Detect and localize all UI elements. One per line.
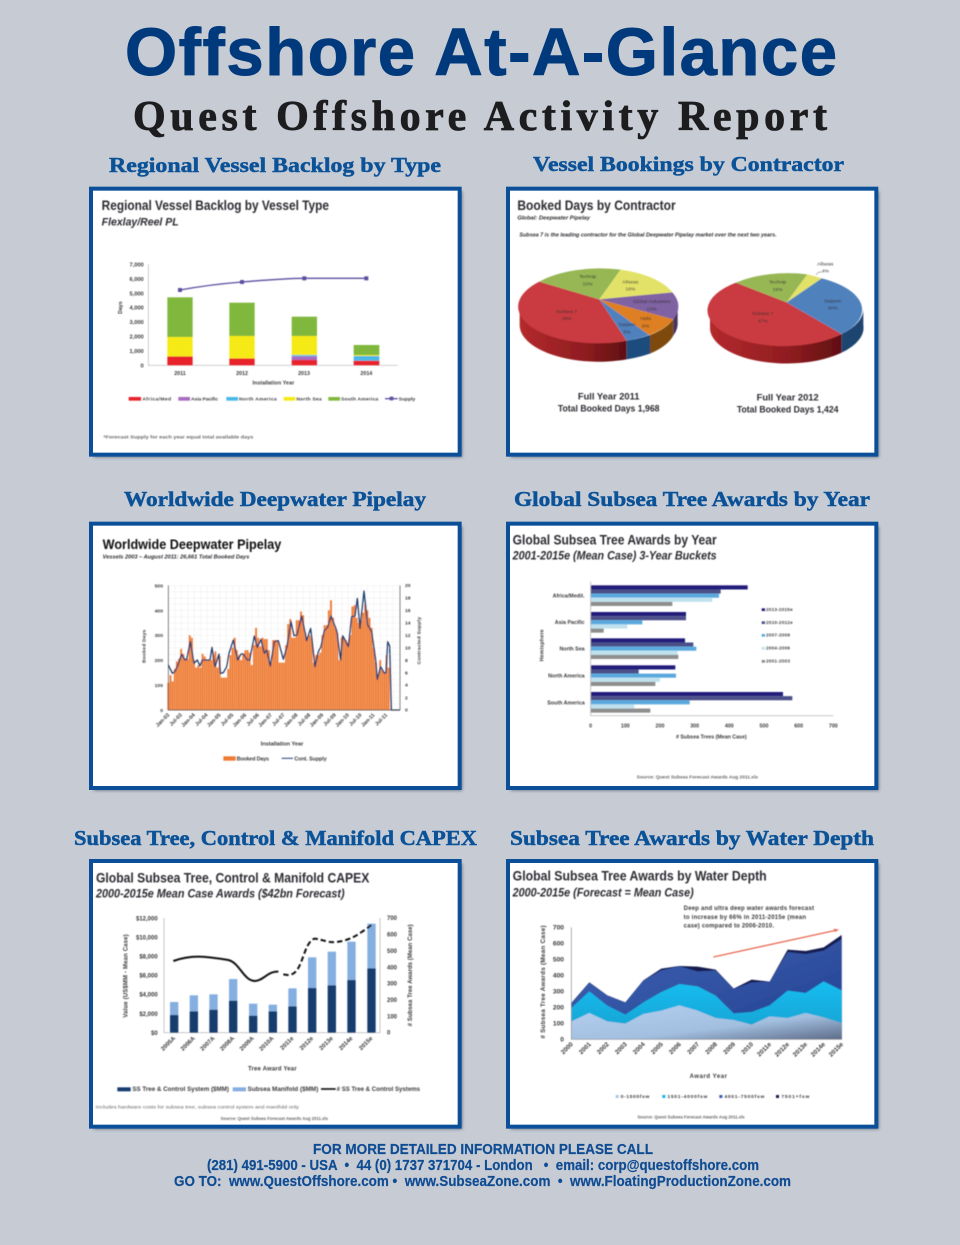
panel: regional vessel backlog chart: *Forecast Supply for each year equal total available days <box>103 435 254 441</box>
panel: water depth chart: 100 <box>553 1021 564 1028</box>
panel: worldwide deepwater pipelay chart: Jul-06 <box>246 712 261 728</box>
panel: capex chart: $10,000 <box>136 935 158 941</box>
panel: worldwide deepwater pipelay chart: Jan-10 <box>335 712 351 729</box>
panel: worldwide deepwater pipelay chart: Jan-04 <box>181 712 197 729</box>
panel: capex chart: Includes hardware costs for subsea tree, subsea control system and manifold only <box>96 1105 300 1111</box>
panel: capex chart: 400 <box>387 965 398 971</box>
panel: global subsea tree awards chart: 600 <box>794 724 803 730</box>
panel: regional vessel backlog chart: 2013 <box>298 371 310 377</box>
legend: North Sea <box>296 396 322 402</box>
legend: Asia Pacific <box>191 396 218 402</box>
heading: vessel bookings: Vessel Bookings by Contractor <box>533 152 844 176</box>
panel: booked days by contractor pies <box>508 189 879 457</box>
panel: regional vessel backlog chart: 2,000 <box>130 335 144 341</box>
panel: worldwide deepwater pipelay chart: 14 <box>405 620 411 626</box>
panel: global subsea tree awards chart: 400 <box>725 724 734 730</box>
panel: water depth chart: 200 <box>553 1005 564 1012</box>
title: Offshore At-A-Glance <box>125 15 837 90</box>
legend: 7501+fsw <box>781 1094 809 1100</box>
panel: water depth chart: 2015e <box>828 1041 845 1059</box>
pie: full year 2011: 6% <box>642 323 650 329</box>
panel: worldwide deepwater pipelay chart: Jul-04 <box>194 712 209 728</box>
area chart <box>571 935 842 1039</box>
panel: worldwide deepwater pipelay chart: Jan-06 <box>232 712 248 729</box>
panel: water depth chart: 2009 <box>722 1041 737 1056</box>
panel: global subsea tree awards chart: 2001-2015e (Mean Case) 3-Year Buckets <box>512 550 717 563</box>
panel: capex chart: $2,000 <box>139 1012 158 1018</box>
legend: 2013-2015e <box>766 607 793 612</box>
legend: Booked Days <box>237 756 269 762</box>
panel: worldwide deepwater pipelay chart: 20 <box>405 583 411 589</box>
panel: worldwide deepwater pipelay chart: Jul-08 <box>297 712 312 728</box>
panel: capex chart: $0 <box>151 1031 158 1037</box>
panel: water depth chart: 2002 <box>596 1041 611 1056</box>
callout text: case) compared to 2006-2010. <box>684 924 774 930</box>
panel: regional vessel backlog chart: Flexlay/Reel PL <box>102 216 179 228</box>
footer contact text: (281) 491-5900 - USA • 44 (0) 1737 371704 - London • email: corp@questoffshore.com <box>207 1158 759 1174</box>
supply line <box>178 276 368 292</box>
pie: full year 2012 <box>707 261 864 363</box>
panel: worldwide deepwater pipelay chart: 200 <box>155 658 163 664</box>
panel: global subsea tree awards chart: 200 <box>656 724 664 730</box>
pie: full year 2011: 22% <box>583 281 593 287</box>
panel: worldwide deepwater pipelay chart: 4 <box>405 683 408 689</box>
panel: capex chart: Tree Award Year <box>248 1067 297 1073</box>
pie: full year 2012: 19% <box>773 287 783 293</box>
legend <box>117 1087 421 1093</box>
panel: global subsea tree awards chart: Hemisphere <box>539 629 545 661</box>
panel: capex chart: # Subsea Tree Awards (Mean Case) <box>408 924 414 1026</box>
callout text: Deep and ultra deep water awards forecast <box>684 906 814 912</box>
panel: capex chart: 2015e <box>358 1035 375 1052</box>
footer contact text <box>174 1142 791 1190</box>
pie: full year 2011: Subsea 7 <box>556 309 577 315</box>
panel: capex chart <box>91 861 462 1129</box>
panel: water depth chart: 2010 <box>740 1041 755 1056</box>
panel: water depth chart: 2011e <box>756 1041 773 1058</box>
heading: regional vessel backlog: Regional Vessel Backlog by Type <box>109 153 441 177</box>
panel: worldwide deepwater pipelay chart: 6 <box>405 670 408 676</box>
pie: full year 2012: Saipem <box>824 299 841 305</box>
panel: regional vessel backlog chart: 2011 <box>174 371 186 377</box>
panel: worldwide deepwater pipelay chart: Jan-08 <box>283 712 299 729</box>
panel: capex chart: Source: Quest Subsea Forecast Awards Aug 2011.xls <box>221 1116 329 1121</box>
panel: worldwide deepwater pipelay chart: Jul-07 <box>271 712 286 728</box>
panel: worldwide deepwater pipelay chart: 0 <box>405 708 408 714</box>
panel: regional vessel backlog chart: 5,000 <box>130 291 144 297</box>
panel: water depth chart: 300 <box>553 989 564 996</box>
heading: water depth: Subsea Tree Awards by Water Depth <box>510 826 874 850</box>
legend: 1501-4000fsw <box>667 1094 707 1100</box>
panel: water depth chart: 2004 <box>632 1041 647 1056</box>
pie: full year 2012: 47% <box>758 318 768 324</box>
line: contracted supply <box>168 591 400 710</box>
panel: global subsea tree awards chart: 300 <box>690 724 699 730</box>
panel: worldwide deepwater pipelay chart: 18 <box>405 596 411 602</box>
panel: capex chart: $12,000 <box>136 916 158 922</box>
panel: capex chart: 100 <box>387 1014 398 1020</box>
panel: worldwide deepwater pipelay chart: Jan-11 <box>360 712 376 728</box>
panel: regional vessel backlog chart: Days <box>118 301 124 314</box>
panel: capex chart: 2009A <box>239 1035 256 1053</box>
panel: capex chart: 2007A <box>200 1035 217 1053</box>
panel: worldwide deepwater pipelay chart: Jul-11 <box>374 712 389 727</box>
panel: water depth chart: 2006 <box>668 1041 683 1056</box>
legend: 2007-2009 <box>766 633 790 638</box>
panel: regional vessel backlog chart: 7,000 <box>130 262 144 268</box>
panel: capex chart: 2010A <box>259 1035 276 1053</box>
legend: # SS Tree & Control Systems <box>337 1087 421 1093</box>
stacked bars <box>170 924 376 1033</box>
panel: capex chart: 2014e <box>338 1035 355 1052</box>
panel: capex chart: Value (US$MM - Mean Case) <box>123 934 129 1018</box>
panel: regional vessel backlog chart: 1,000 <box>130 349 144 355</box>
panel: booked days by contractor pies: Subsea 7 is the leading contractor for the Global Deepwater Pipelay market over the next two years. <box>519 232 777 238</box>
heading: global subsea tree awards: Global Subsea Tree Awards by Year <box>514 487 870 511</box>
legend: North America <box>239 396 277 402</box>
line: ss tree systems <box>173 924 372 981</box>
pie: full year 2011: Helix <box>640 316 652 322</box>
panel: booked days by contractor pies: Full Year 2011 <box>578 392 639 402</box>
panel: water depth chart: 700 <box>553 925 564 932</box>
panel: water depth chart: # Subsea Tree Awards (Mean Case) <box>540 925 547 1039</box>
panel: capex chart: $4,000 <box>139 993 158 999</box>
panel: water depth chart: 0 <box>560 1037 564 1044</box>
heading: capex: Subsea Tree, Control & Manifold CAPEX <box>74 826 477 850</box>
panel: global subsea tree awards chart: North Sea <box>559 646 585 652</box>
panel: worldwide deepwater pipelay chart: Jan-07 <box>258 712 274 729</box>
legend: 2010-2012e <box>766 620 793 625</box>
panel: water depth chart: 2012e <box>774 1041 791 1059</box>
footer contact text: GO TO: www.QuestOffshore.com • www.SubseaZone.com • www.FloatingProductionZone.com <box>174 1174 791 1190</box>
legend: 4001-7500fsw <box>724 1094 764 1100</box>
panel: worldwide deepwater pipelay chart: Contracted Supply <box>416 617 422 664</box>
panel: global subsea tree awards chart <box>508 524 879 791</box>
pie: full year 2011 <box>518 268 678 362</box>
panel: global subsea tree awards chart: North America <box>548 674 585 680</box>
pie: full year 2011: Technip <box>579 274 596 280</box>
panel: global subsea tree awards chart: Africa/Medit. <box>553 593 585 599</box>
panel: capex chart: 2008A <box>219 1035 237 1053</box>
legend: Cont. Supply <box>294 756 327 762</box>
panel: capex chart: 700 <box>387 916 398 922</box>
pie: full year 2011: Allseas <box>622 279 639 285</box>
legend <box>129 396 416 402</box>
panel: water depth chart: Source: Quest Subsea Forecast Awards Aug 2011.xls <box>637 1115 745 1120</box>
pie: full year 2011: Global Industries <box>633 299 671 305</box>
panel: water depth chart: Global Subsea Tree Awards by Water Depth <box>513 869 767 884</box>
panel: global subsea tree awards chart: Global Subsea Tree Awards by Year <box>513 532 717 547</box>
legend: Subsea Manifold ($MM) <box>248 1087 318 1093</box>
panel: worldwide deepwater pipelay chart: Jul-03 <box>169 712 184 728</box>
panel: water depth chart: 500 <box>553 957 564 964</box>
panel: worldwide deepwater pipelay chart <box>91 524 462 791</box>
panel: water depth chart: 2014e <box>810 1041 827 1059</box>
pie: full year 2011: 39% <box>562 316 572 322</box>
panel: booked days by contractor pies: Total Booked Days 1,424 <box>737 404 839 414</box>
legend <box>762 607 793 664</box>
panel: worldwide deepwater pipelay chart: 2 <box>405 695 408 701</box>
pie: full year 2011: 16% <box>625 287 636 293</box>
panel: worldwide deepwater pipelay chart: Jan-09 <box>309 712 325 729</box>
subtitle: Quest Offshore Activity Report <box>133 94 827 140</box>
panel: water depth chart: 400 <box>553 973 564 980</box>
panel: global subsea tree awards chart: 0 <box>589 724 592 730</box>
panel: booked days by contractor pies: Booked Days by Contractor <box>517 198 676 213</box>
panel: worldwide deepwater pipelay chart: Jul-09 <box>323 712 338 728</box>
panel: worldwide deepwater pipelay chart: Jan-05 <box>206 712 222 729</box>
panel: global subsea tree awards chart: 700 <box>829 724 838 730</box>
panel: regional vessel backlog chart: 2012 <box>236 371 248 377</box>
pie: full year 2012: Allseas <box>817 261 834 267</box>
legend <box>223 756 327 762</box>
panel: global subsea tree awards chart: Asia Pacific <box>555 620 585 626</box>
panel: worldwide deepwater pipelay chart: 500 <box>155 583 163 589</box>
bars: booked days <box>168 600 389 710</box>
panel: capex chart: 500 <box>387 949 398 955</box>
panel: global subsea tree awards chart: # Subsea Trees (Mean Case) <box>676 735 747 741</box>
panel: water depth chart: 600 <box>553 941 564 948</box>
legend: SS Tree & Control System ($MM) <box>132 1087 229 1093</box>
panel: water depth chart: 2000-2015e (Forecast = Mean Case) <box>512 886 694 899</box>
panel: worldwide deepwater pipelay chart: Jan-03 <box>155 712 171 729</box>
heading: worldwide deepwater pipelay: Worldwide Deepwater Pipelay <box>124 487 427 511</box>
panel: capex chart: 600 <box>387 933 398 939</box>
panel: water depth chart: 2007 <box>686 1041 701 1056</box>
panel: capex chart: 0 <box>387 1031 391 1037</box>
pie: full year 2011: 5% <box>623 329 631 335</box>
panel: worldwide deepwater pipelay chart: 0 <box>160 708 163 714</box>
panel: booked days by contractor pies: Global: Deepwater Pipelay <box>517 216 591 222</box>
legend: 0-1500fsw <box>621 1094 649 1100</box>
panel: capex chart: 200 <box>387 998 398 1004</box>
panel: capex chart: $6,000 <box>139 974 158 980</box>
panel: worldwide deepwater pipelay chart: Vessels 2003 – August 2011: 26,661 Total Booked Days <box>103 555 249 561</box>
pie: full year 2011: Saipem <box>619 322 635 328</box>
footer contact text: FOR MORE DETAILED INFORMATION PLEASE CALL <box>313 1142 653 1158</box>
panel: regional vessel backlog chart <box>91 189 462 457</box>
panel: worldwide deepwater pipelay chart: 10 <box>405 645 411 651</box>
panel: capex chart: 2006A <box>180 1035 197 1053</box>
panel: water depth chart: 2000 <box>560 1041 575 1056</box>
panel: regional vessel backlog chart: Regional Vessel Backlog by Vessel Type <box>102 198 329 213</box>
panel: worldwide deepwater pipelay chart: 100 <box>155 683 163 689</box>
panel: regional vessel backlog chart: Installation Year <box>252 381 294 387</box>
stacked bars <box>167 297 379 365</box>
panel: worldwide deepwater pipelay chart: 8 <box>405 658 408 664</box>
pie: full year 2012: 30% <box>828 306 838 312</box>
panel: water depth chart: 2008 <box>704 1041 719 1056</box>
panel: worldwide deepwater pipelay chart: Booked Days <box>142 629 148 663</box>
panel: water depth chart: 2013e <box>792 1041 809 1059</box>
panel: booked days by contractor pies: Total Booked Days 1,968 <box>558 404 659 414</box>
pie: full year 2011: 12% <box>647 306 657 312</box>
panel: capex chart: 2011e <box>280 1035 296 1052</box>
panel: regional vessel backlog chart: 6,000 <box>130 277 144 283</box>
legend <box>616 1094 809 1100</box>
panel: regional vessel backlog chart: 4,000 <box>130 306 144 312</box>
panel: worldwide deepwater pipelay chart: 300 <box>155 633 163 639</box>
panel: capex chart: 300 <box>387 982 398 988</box>
panel: global subsea tree awards chart: 500 <box>760 724 768 730</box>
panel: worldwide deepwater pipelay chart: Jul-05 <box>220 712 235 728</box>
panel: worldwide deepwater pipelay chart: Installation Year <box>261 741 304 747</box>
panel: worldwide deepwater pipelay chart: 16 <box>405 608 411 614</box>
panel: capex chart: 2012e <box>299 1035 316 1052</box>
legend: 2001-2003 <box>766 659 790 664</box>
pie: full year 2012: Subsea 7 <box>752 311 773 317</box>
panel: worldwide deepwater pipelay chart: Jul-10 <box>348 712 363 728</box>
panel: worldwide deepwater pipelay chart: 12 <box>405 633 411 639</box>
panel: worldwide deepwater pipelay chart: 400 <box>155 608 163 614</box>
panel: water depth chart: 2001 <box>578 1041 593 1056</box>
arrow <box>713 930 837 957</box>
legend: Supply <box>399 396 416 402</box>
panel: water depth chart <box>508 861 879 1129</box>
panel: capex chart: $8,000 <box>139 955 158 961</box>
panel: global subsea tree awards chart: 100 <box>621 724 630 730</box>
callout text <box>684 906 814 930</box>
legend: 2004-2006 <box>766 646 790 651</box>
panel: booked days by contractor pies: Full Year 2012 <box>757 392 819 402</box>
panel: global subsea tree awards chart: Source: Quest Subsea Forecast Awards Aug 2011.xls <box>637 775 758 780</box>
panel: capex chart: 2005A <box>160 1035 178 1053</box>
panel: regional vessel backlog chart: 0 <box>141 363 144 369</box>
panel: water depth chart: Award Year <box>690 1074 728 1080</box>
panel: capex chart: Global Subsea Tree, Control & Manifold CAPEX <box>96 870 369 885</box>
panel: capex chart: 2000-2015e Mean Case Awards ($42bn Forecast) <box>95 888 345 901</box>
horizontal bars <box>591 585 792 713</box>
panel: global subsea tree awards chart: South America <box>547 700 585 706</box>
panel: regional vessel backlog chart: 2014 <box>360 371 372 377</box>
pie: full year 2012: Technip <box>769 280 786 286</box>
panel: worldwide deepwater pipelay chart: Worldwide Deepwater Pipelay <box>103 537 282 552</box>
legend: South America <box>341 396 379 402</box>
panel: water depth chart: 2005 <box>650 1041 665 1056</box>
panel: capex chart: 2013e <box>319 1035 335 1052</box>
panel: water depth chart: 2003 <box>614 1041 629 1056</box>
panel: regional vessel backlog chart: 3,000 <box>130 320 144 326</box>
callout text: to increase by 66% in 2011-2015e (mean <box>684 915 806 921</box>
legend: Africa/Med <box>142 396 171 402</box>
pie: full year 2012: 4% <box>822 269 829 275</box>
